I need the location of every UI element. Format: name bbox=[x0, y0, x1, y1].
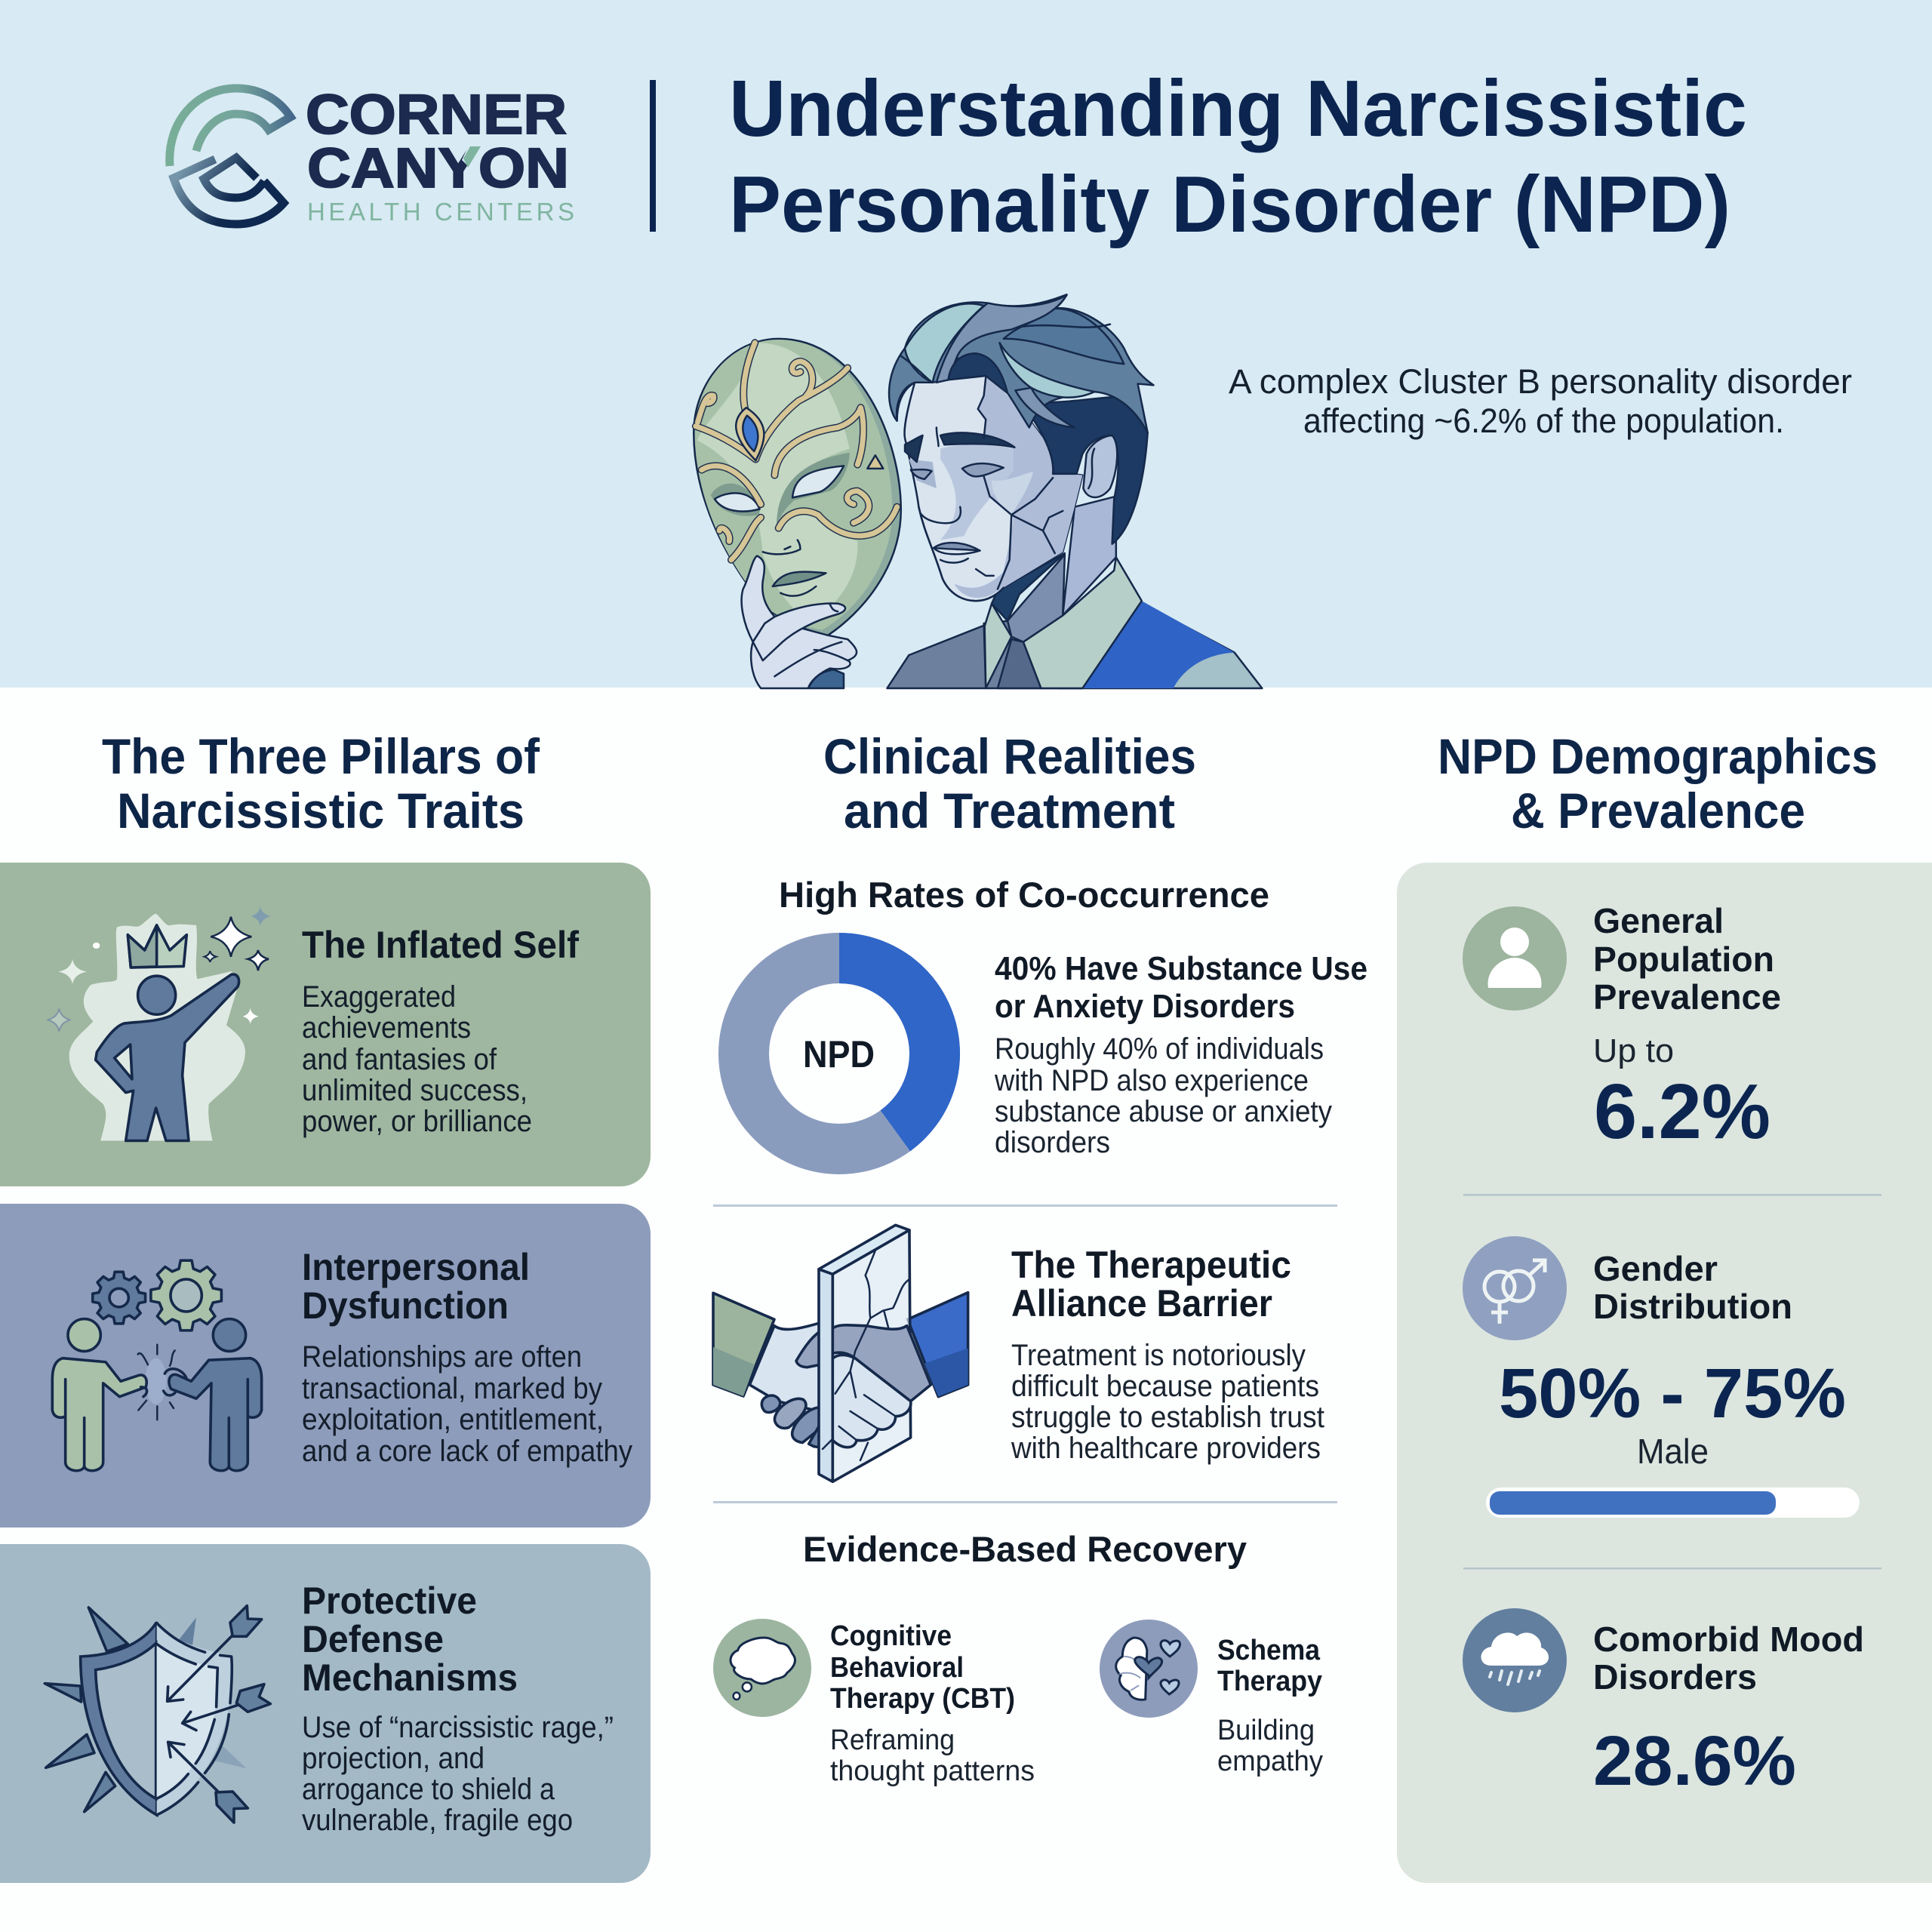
text: co-occurrence stat: or Anxiety Disorders bbox=[995, 988, 1295, 1025]
text: comorbid mood disorders: Comorbid Mood bbox=[1593, 1620, 1864, 1659]
heading: clinical realities: and Treatment bbox=[844, 783, 1175, 838]
text: the inflated self: unlimited success, bbox=[302, 1074, 528, 1107]
text: co-occurrence stat: disorders bbox=[995, 1126, 1110, 1159]
text: interpersonal dysfunction: Relationships are often bbox=[302, 1340, 582, 1374]
text: protective defense mechanisms bbox=[302, 1580, 614, 1837]
text: interpersonal dysfunction: and a core lack of empathy bbox=[302, 1435, 632, 1468]
text: interpersonal dysfunction: transactional, marked by bbox=[302, 1372, 602, 1405]
text: therapeutic alliance barrier: with healthcare providers bbox=[1011, 1432, 1321, 1465]
text: general population: Population bbox=[1593, 940, 1774, 979]
text: protective defense mechanisms: Defense bbox=[302, 1618, 444, 1660]
logo mark bbox=[170, 88, 291, 224]
chart: donut 40 percent: NPD bbox=[803, 1033, 875, 1075]
text: the inflated self: Exaggerated bbox=[302, 980, 456, 1014]
text: the inflated self bbox=[302, 924, 579, 1138]
header divider bbox=[650, 80, 656, 232]
text: the inflated self: achievements bbox=[302, 1011, 471, 1044]
stat: gender distribution bbox=[1463, 1236, 1860, 1518]
tagline bbox=[1229, 362, 1852, 440]
text: gender distribution: 50% - 75% bbox=[1499, 1354, 1846, 1432]
heading: three pillars: The Three Pillars of bbox=[102, 728, 540, 784]
text: general population: Prevalence bbox=[1593, 977, 1781, 1017]
tagline: A complex Cluster B personality disorder bbox=[1229, 362, 1852, 401]
title bbox=[729, 64, 1747, 249]
text: gender distribution: Gender bbox=[1593, 1249, 1718, 1288]
icon: brain and hearts bbox=[1100, 1620, 1198, 1718]
text: gender distribution bbox=[1499, 1249, 1846, 1471]
icon: crowned figure bbox=[48, 906, 270, 1141]
chart: donut 40 percent bbox=[744, 958, 934, 1149]
illustration: man holding a mask bbox=[694, 294, 1262, 688]
text: protective defense mechanisms: Use of “narcissistic rage,” bbox=[302, 1711, 614, 1744]
text: schema therapy bbox=[1217, 1635, 1323, 1777]
logo wordmark: CORNER bbox=[306, 83, 567, 146]
text: protective defense mechanisms: Mechanisms bbox=[302, 1657, 518, 1699]
text: protective defense mechanisms: vulnerable, fragile ego bbox=[302, 1804, 573, 1837]
text: the inflated self: The Inflated Self bbox=[302, 924, 579, 966]
hand holding mask bbox=[742, 556, 857, 688]
text: CBT: Therapy (CBT) bbox=[830, 1683, 1015, 1715]
subheading: recovery: Evidence-Based Recovery bbox=[803, 1529, 1247, 1569]
text: protective defense mechanisms: Protective bbox=[302, 1580, 477, 1622]
text: comorbid mood disorders: Disorders bbox=[1593, 1657, 1757, 1697]
panel: demographics bbox=[1397, 863, 1932, 1883]
section: evidence-based recovery bbox=[713, 1529, 1323, 1787]
text: CBT: Cognitive bbox=[830, 1620, 952, 1652]
text: CBT: Behavioral bbox=[830, 1652, 964, 1684]
bar: male share bbox=[1486, 1487, 1860, 1518]
text: interpersonal dysfunction: exploitation, entitlement, bbox=[302, 1403, 604, 1436]
text: schema therapy: Schema bbox=[1217, 1635, 1321, 1666]
icon: rain cloud bbox=[1463, 1608, 1567, 1712]
text: therapeutic alliance barrier: Treatment is notoriously bbox=[1011, 1339, 1306, 1372]
text: schema therapy: empathy bbox=[1217, 1746, 1323, 1777]
icon: thought bubble bbox=[713, 1619, 811, 1717]
text: CBT bbox=[830, 1620, 1035, 1787]
text: schema therapy: Building bbox=[1217, 1715, 1315, 1746]
heading: three pillars: Narcissistic Traits bbox=[117, 783, 525, 838]
icon: clashing people and gears bbox=[52, 1260, 262, 1471]
panel: protective defense mechanisms bbox=[0, 1544, 651, 1883]
text: co-occurrence stat: with NPD also experience bbox=[994, 1064, 1309, 1097]
icon: person bbox=[1463, 906, 1567, 1011]
text: general population: 6.2% bbox=[1594, 1068, 1770, 1155]
icon: handshake through cracked glass bbox=[713, 1225, 968, 1481]
text: therapeutic alliance barrier: The Therapeutic bbox=[1011, 1244, 1291, 1286]
title: Personality Disorder (NPD) bbox=[729, 160, 1730, 249]
man bbox=[887, 294, 1262, 688]
text: therapeutic alliance barrier bbox=[1011, 1244, 1324, 1465]
text: general population: Up to bbox=[1593, 1032, 1674, 1069]
section: therapeutic alliance barrier bbox=[713, 1225, 1324, 1481]
heading: clinical realities bbox=[823, 728, 1196, 838]
icon: gender symbols bbox=[1463, 1236, 1567, 1340]
icon: shield with arrows bbox=[45, 1606, 270, 1823]
text: CBT: thought patterns bbox=[830, 1755, 1035, 1787]
text: CBT: Reframing bbox=[830, 1724, 955, 1756]
text: protective defense mechanisms: projection, and bbox=[302, 1742, 485, 1775]
heading: demographics bbox=[1438, 728, 1878, 838]
text: gender distribution: Distribution bbox=[1593, 1287, 1792, 1326]
text: the inflated self: power, or brilliance bbox=[302, 1105, 532, 1138]
text: comorbid mood disorders: 28.6% bbox=[1593, 1721, 1796, 1800]
logo wordmark: CANYON bbox=[307, 137, 569, 199]
text: general population bbox=[1593, 901, 1781, 1155]
text: interpersonal dysfunction: Interpersonal bbox=[302, 1246, 530, 1288]
text: therapeutic alliance barrier: difficult because patients bbox=[1011, 1370, 1319, 1403]
text: gender distribution: Male bbox=[1637, 1432, 1709, 1471]
logo wordmark bbox=[306, 83, 574, 226]
heading: demographics: NPD Demographics bbox=[1438, 728, 1878, 784]
heading: clinical realities: Clinical Realities bbox=[823, 728, 1196, 784]
text: interpersonal dysfunction bbox=[302, 1246, 632, 1468]
title: Understanding Narcissistic bbox=[729, 64, 1747, 153]
logo wordmark: HEALTH CENTERS bbox=[307, 198, 574, 226]
text: therapeutic alliance barrier: Alliance Barrier bbox=[1011, 1282, 1272, 1324]
text: comorbid mood disorders bbox=[1593, 1620, 1864, 1800]
section: co-occurrence bbox=[744, 875, 1367, 1159]
heading: demographics: & Prevalence bbox=[1511, 783, 1805, 838]
text: co-occurrence stat: Roughly 40% of individuals bbox=[995, 1032, 1324, 1066]
heading: three pillars bbox=[102, 728, 540, 838]
text: co-occurrence stat bbox=[994, 950, 1367, 1159]
stat: comorbid mood disorders bbox=[1463, 1608, 1864, 1800]
text: protective defense mechanisms: arrogance to shield a bbox=[302, 1773, 555, 1806]
text: therapeutic alliance barrier: struggle to establish trust bbox=[1011, 1401, 1324, 1434]
text: interpersonal dysfunction: Dysfunction bbox=[302, 1284, 509, 1327]
stat: general population prevalence bbox=[1463, 901, 1781, 1155]
sparkles bbox=[48, 906, 270, 1032]
panel: the inflated self bbox=[0, 863, 651, 1186]
text: general population: General bbox=[1593, 901, 1724, 940]
text: the inflated self: and fantasies of bbox=[302, 1043, 497, 1076]
tagline: affecting ~6.2% of the population. bbox=[1303, 401, 1784, 440]
subheading: co-occurrence: High Rates of Co-occurrence bbox=[779, 875, 1269, 915]
mask bbox=[694, 339, 901, 635]
text: co-occurrence stat: 40% Have Substance Use bbox=[995, 950, 1367, 987]
text: schema therapy: Therapy bbox=[1217, 1666, 1322, 1697]
panel: interpersonal dysfunction bbox=[0, 1204, 651, 1527]
logo: Corner Canyon Health Centers bbox=[170, 83, 574, 226]
header band bbox=[0, 0, 1932, 688]
text: co-occurrence stat: substance abuse or anxiety bbox=[995, 1095, 1332, 1128]
